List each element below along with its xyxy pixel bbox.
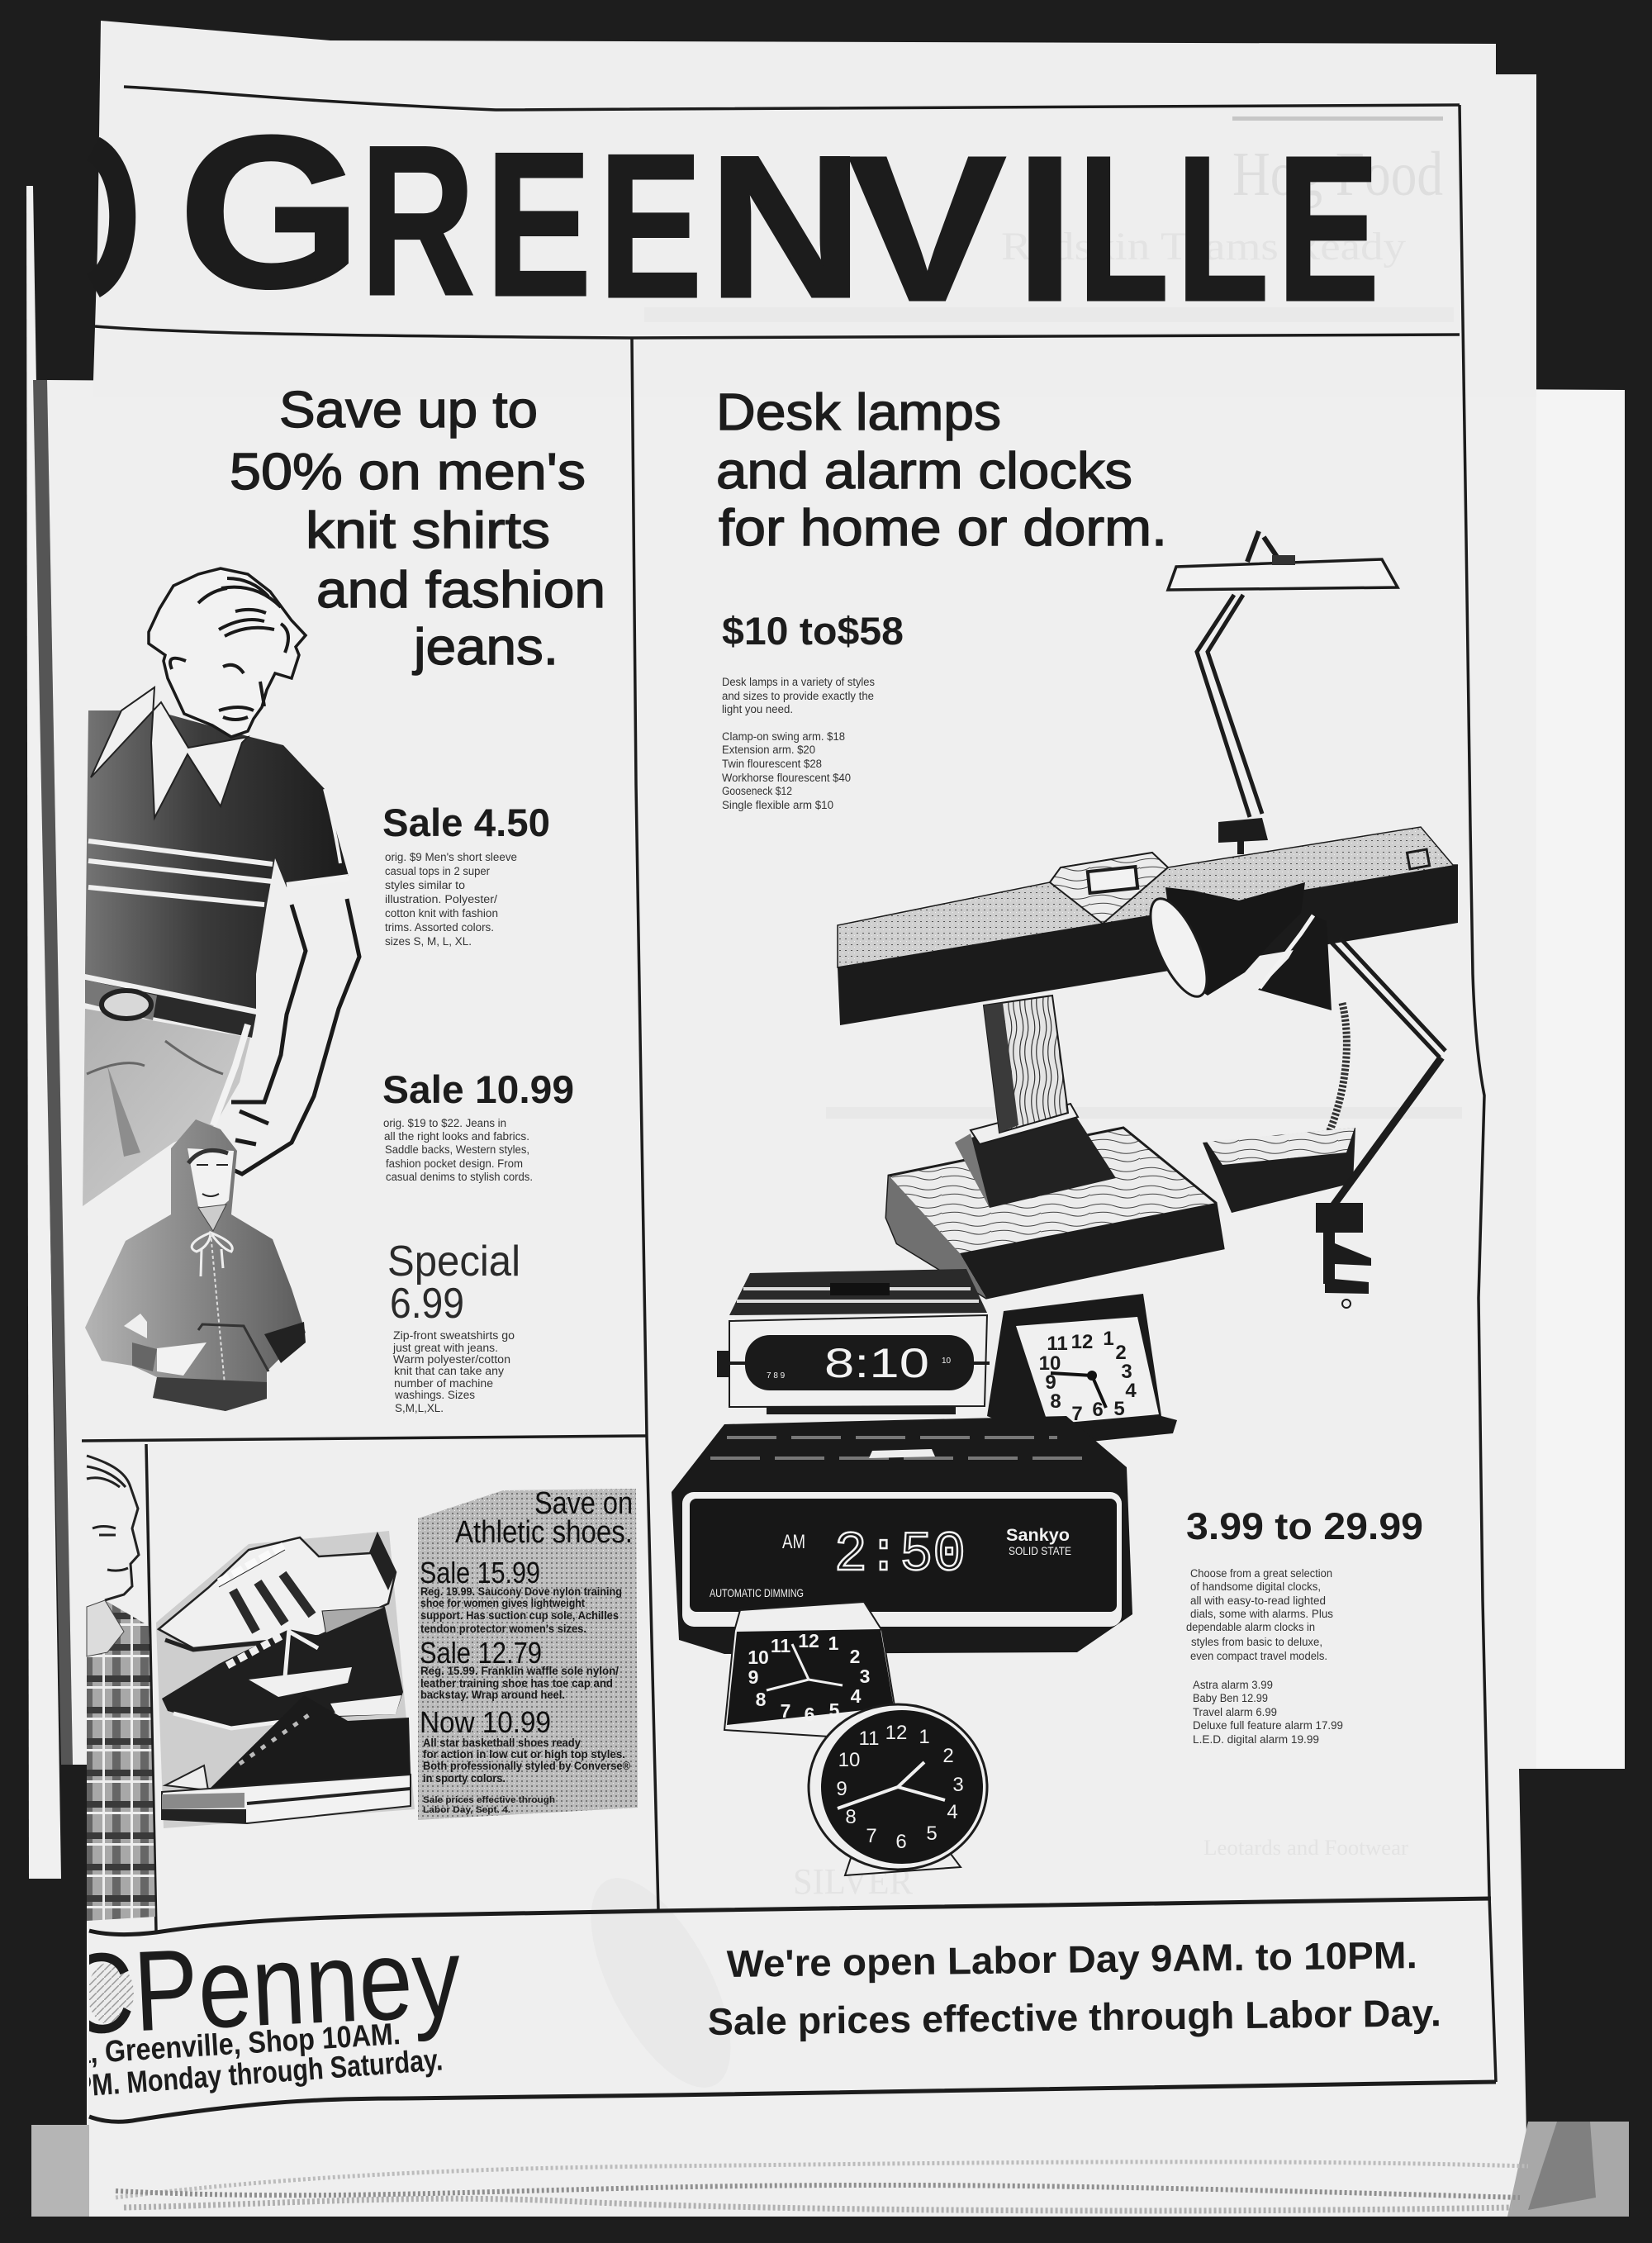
price: jeans: Sale 10.99 bbox=[382, 1067, 574, 1111]
illustration: Astra alarm clock bbox=[724, 1602, 895, 1737]
illustration: Astra alarm clock: 11 bbox=[771, 1635, 790, 1656]
logo: JCPenney bbox=[89, 1951, 459, 2041]
store hours: a, Greenville, Shop 10AM. bbox=[74, 2017, 401, 2070]
knit tops description: illustration. Polyester/ bbox=[385, 893, 497, 905]
clocks description: even compact travel models. bbox=[1190, 1650, 1327, 1662]
clocks description: Deluxe full feature alarm 17.99 bbox=[1193, 1719, 1343, 1732]
illustration: round Baby Ben alarm clock: 3 bbox=[952, 1774, 964, 1796]
store hours: PM. Monday through Saturday. bbox=[74, 2042, 444, 2103]
illustration: Astra alarm clock: 4 bbox=[851, 1685, 862, 1707]
jeans description: all the right looks and fabrics. bbox=[384, 1130, 529, 1143]
illustration: round Baby Ben alarm clock: 8 bbox=[845, 1806, 857, 1828]
bleed-through text from the reverse page: Redskin Teams Ready bbox=[1001, 225, 1406, 268]
illustration: round Baby Ben alarm clock: 10 bbox=[838, 1749, 860, 1771]
illustration: folding travel clock: 3 bbox=[1121, 1361, 1132, 1383]
illustration: folding travel clock: 7 bbox=[1071, 1403, 1083, 1425]
panel: athletic shoes copy: Reg. 19.99. Saucony Dove nylon training bbox=[420, 1585, 622, 1598]
illustration: 8:10 flip clock: 10 bbox=[942, 1357, 952, 1366]
paper folds at bottom bbox=[116, 2162, 1528, 2211]
heading: men's knit shirts: jeans. bbox=[412, 619, 558, 676]
illustration: round Baby Ben alarm clock: 2 bbox=[942, 1745, 954, 1767]
store hours bbox=[89, 2023, 442, 2095]
illustration: Sankyo digital clock: Sankyo bbox=[1006, 1526, 1070, 1545]
clocks description: dials, some with alarms. Plus bbox=[1190, 1608, 1333, 1620]
price: clocks: 3.99 to 29.99 bbox=[1186, 1505, 1423, 1547]
panel: athletic shoes copy: leather training shoe has toe cap and bbox=[420, 1676, 613, 1689]
heading: desk lamps and alarm clocks: Desk lamps bbox=[716, 384, 1001, 441]
illustration: large wood-grain desk lamp bbox=[838, 827, 1458, 1298]
panel: athletic shoes copy bbox=[418, 1486, 638, 1820]
footer message: Sale prices effective through Labor Day. bbox=[707, 1991, 1441, 2043]
panel: athletic shoes copy: Labor Day, Sept. 4. bbox=[423, 1805, 510, 1815]
illustration: gooseneck and swing-arm lamps bbox=[1203, 915, 1446, 1308]
sweatshirt description: S,M,L,XL. bbox=[395, 1402, 444, 1414]
title: GREENVILLE: L bbox=[1078, 113, 1169, 344]
price: sweatshirt special bbox=[387, 1238, 520, 1328]
sweatshirt description: washings. Sizes bbox=[394, 1389, 475, 1401]
illustration: round Baby Ben alarm clock bbox=[809, 1704, 987, 1875]
knit tops description: trims. Assorted colors. bbox=[385, 921, 494, 934]
panel: athletic shoes copy: shoe for women gives lightweight bbox=[420, 1596, 585, 1609]
clocks description: Travel alarm 6.99 bbox=[1193, 1706, 1277, 1718]
footer message: We're open Labor Day 9AM. to 10PM. bbox=[726, 1933, 1417, 1985]
jeans description: orig. $19 to $22. Jeans in bbox=[383, 1117, 506, 1129]
panel: athletic shoes copy: Save on bbox=[534, 1486, 633, 1521]
logo: JCPenney: CPenney bbox=[61, 1913, 463, 2059]
illustration: round Baby Ben alarm clock: 9 bbox=[836, 1778, 847, 1800]
bleed-through text from the reverse page bbox=[563, 116, 1462, 2108]
lamp description: Desk lamps in a variety of styles bbox=[722, 676, 875, 688]
lamp description: Gooseneck $12 bbox=[722, 785, 792, 797]
illustration: hooded sweatshirt bbox=[85, 1119, 306, 1411]
title: GREENVILLE: V bbox=[848, 113, 1006, 344]
heading: desk lamps and alarm clocks bbox=[716, 384, 1167, 557]
illustration: folding travel clock: 11 bbox=[1047, 1333, 1068, 1355]
clocks description: Astra alarm 3.99 bbox=[1193, 1679, 1273, 1691]
panel: athletic shoes copy: All star basketball shoes ready bbox=[423, 1736, 581, 1749]
lamp description: Workhorse flourescent $40 bbox=[722, 772, 851, 784]
panel: athletic shoes copy: Sale prices effective through bbox=[423, 1795, 555, 1805]
illustration: 8:10 flip clock: 7 8 9 bbox=[767, 1371, 786, 1380]
heading: men's knit shirts: 50% on men's bbox=[230, 444, 586, 501]
knit tops description: sizes S, M, L, XL. bbox=[385, 935, 472, 948]
illustration: man in knit shirt and jeans bbox=[83, 568, 359, 1206]
sweatshirt description: knit that can take any bbox=[394, 1365, 504, 1377]
illustration: 8:10 flip clock bbox=[717, 1269, 990, 1414]
title: GREENVILLE: I bbox=[1016, 113, 1074, 344]
heading: men's knit shirts bbox=[230, 382, 605, 676]
title: GREENVILLE: N bbox=[708, 113, 863, 340]
price: sweatshirt special: 6.99 bbox=[390, 1280, 464, 1328]
illustration: Astra alarm clock: 6 bbox=[805, 1704, 814, 1725]
illustration: round Baby Ben alarm clock: 1 bbox=[919, 1726, 930, 1748]
panel: athletic shoes copy: Sale 12.79 bbox=[420, 1636, 542, 1670]
illustration: folding travel clock: 6 bbox=[1092, 1399, 1104, 1421]
illustration: folding travel clock: 10 bbox=[1039, 1352, 1061, 1375]
jeans description: casual denims to stylish cords. bbox=[386, 1171, 533, 1183]
illustration: Astra alarm clock: 9 bbox=[748, 1666, 758, 1688]
illustration: round Baby Ben alarm clock: 11 bbox=[859, 1727, 879, 1750]
clocks description: Choose from a great selection bbox=[1190, 1567, 1332, 1580]
illustration: folding travel clock: 8 bbox=[1050, 1390, 1061, 1413]
clocks description: all with easy-to-read lighted bbox=[1190, 1594, 1326, 1607]
illustration: Astra alarm clock: 2 bbox=[850, 1646, 860, 1667]
lamp description: Extension arm. $20 bbox=[722, 744, 815, 756]
panel: athletic shoes copy: Both professionally styled by Converse® bbox=[423, 1759, 631, 1772]
illustration: Astra alarm clock: 7 bbox=[781, 1700, 790, 1722]
illustration: Astra alarm clock: 8 bbox=[756, 1689, 767, 1710]
jeans description: fashion pocket design. From bbox=[386, 1157, 523, 1170]
illustration: round Baby Ben alarm clock: 7 bbox=[866, 1825, 877, 1847]
sweatshirt description: Warm polyester/cotton bbox=[393, 1353, 510, 1366]
illustration: Sankyo digital clock bbox=[672, 1416, 1132, 1654]
clocks description: Baby Ben 12.99 bbox=[1193, 1692, 1268, 1704]
panel: athletic shoes copy: in sporty colors. bbox=[423, 1771, 506, 1784]
clocks description: L.E.D. digital alarm 19.99 bbox=[1193, 1733, 1319, 1746]
illustration: folding travel clock: 4 bbox=[1125, 1380, 1137, 1402]
partial letter at left of masthead bbox=[93, 149, 122, 286]
lamp description bbox=[722, 676, 875, 811]
title: GREENVILLE: E bbox=[1277, 113, 1379, 344]
knit tops description: casual tops in 2 super bbox=[385, 865, 490, 877]
illustration: Sankyo digital clock: SOLID STATE bbox=[1009, 1544, 1071, 1557]
title: GREENVILLE: E bbox=[486, 109, 591, 339]
heading: desk lamps and alarm clocks: for home or dorm. bbox=[719, 500, 1167, 557]
lamp description: and sizes to provide exactly the bbox=[722, 690, 874, 702]
title: GREENVILLE: R bbox=[360, 101, 475, 340]
jeans description bbox=[383, 1117, 533, 1183]
panel: athletic shoes copy: Now 10.99 bbox=[420, 1705, 551, 1739]
illustration: man in plaid shirt bbox=[87, 1456, 155, 1921]
illustration: round Baby Ben alarm clock: 4 bbox=[947, 1801, 958, 1823]
illustration: Astra alarm clock: 12 bbox=[798, 1630, 819, 1651]
illustration: folding travel clock: 2 bbox=[1115, 1342, 1127, 1364]
heading: men's knit shirts: knit shirts bbox=[306, 502, 550, 559]
clocks description bbox=[1186, 1567, 1343, 1746]
lamp description: Clamp-on swing arm. $18 bbox=[722, 730, 845, 743]
bleed-through text from the reverse page: Leotards and Footwear bbox=[1203, 1836, 1408, 1860]
panel: athletic shoes copy: tendon protector women's sizes. bbox=[420, 1622, 586, 1635]
clocks description: dependable alarm clocks in bbox=[1186, 1621, 1315, 1633]
frame lines of the ad bbox=[82, 87, 1496, 2122]
knit tops description: styles similar to bbox=[385, 879, 465, 891]
illustration: folding travel clock: 9 bbox=[1045, 1371, 1056, 1394]
sweatshirt description: number of machine bbox=[394, 1377, 493, 1390]
illustration: workhorse fluorescent lamp bbox=[1168, 531, 1398, 854]
title: GREENVILLE: L bbox=[1176, 113, 1269, 344]
jeans description: Saddle backs, Western styles, bbox=[385, 1143, 529, 1156]
title: GREENVILLE: G bbox=[178, 91, 362, 333]
heading: desk lamps and alarm clocks: and alarm clocks bbox=[716, 443, 1132, 500]
illustration: round Baby Ben alarm clock: 6 bbox=[895, 1831, 907, 1853]
price: lamps: $10 to$58 bbox=[722, 609, 904, 653]
illustration: Sankyo digital clock: 2:50 bbox=[834, 1523, 966, 1587]
panel: athletic shoes copy: for action in low cut or high top styles. bbox=[423, 1747, 625, 1761]
clocks description: of handsome digital clocks, bbox=[1190, 1580, 1321, 1593]
illustration: folding travel clock: 12 bbox=[1071, 1331, 1093, 1353]
illustration: Astra alarm clock: 10 bbox=[748, 1647, 769, 1668]
lamp description: light you need. bbox=[722, 703, 793, 715]
illustration: folding travel clock: 5 bbox=[1113, 1398, 1125, 1420]
price: sweatshirt special: Special bbox=[387, 1238, 520, 1285]
bleed-through text from the reverse page: Hog Food bbox=[1232, 140, 1443, 209]
lamp description: Twin flourescent $28 bbox=[722, 758, 822, 770]
illustration: folding travel clock bbox=[987, 1294, 1177, 1446]
sweatshirt description: just great with jeans. bbox=[392, 1342, 498, 1354]
bleed-through text from the reverse page: SILVER bbox=[793, 1861, 914, 1902]
price: knit tops: Sale 4.50 bbox=[382, 801, 550, 844]
knit tops description: orig. $9 Men's short sleeve bbox=[385, 851, 517, 863]
panel: athletic shoes copy: Athletic shoes. bbox=[455, 1515, 633, 1550]
illustration: folding travel clock: 1 bbox=[1103, 1328, 1114, 1350]
panel: athletic shoes copy: backstay. Wrap around heel. bbox=[420, 1688, 565, 1701]
illustration: Astra alarm clock: 3 bbox=[860, 1666, 870, 1687]
footer message bbox=[707, 1933, 1441, 2043]
illustration: round Baby Ben alarm clock: 5 bbox=[926, 1822, 938, 1845]
heading: men's knit shirts: and fashion bbox=[316, 562, 605, 619]
heading: men's knit shirts: Save up to bbox=[279, 382, 538, 439]
knit tops description bbox=[385, 851, 517, 948]
illustration: 8:10 flip clock: 8:10 bbox=[824, 1340, 929, 1386]
illustration: Astra alarm clock: 1 bbox=[828, 1632, 839, 1654]
sweatshirt description: Zip-front sweatshirts go bbox=[393, 1329, 515, 1342]
panel: athletic shoes copy: Reg. 15.99. Franklin waffle sole nylon/ bbox=[420, 1664, 619, 1677]
clocks description: styles from basic to deluxe, bbox=[1191, 1636, 1322, 1648]
illustration: Astra alarm clock: 5 bbox=[829, 1699, 840, 1721]
illustration: Sankyo digital clock: AUTOMATIC DIMMING bbox=[710, 1586, 804, 1599]
lamp description: Single flexible arm $10 bbox=[722, 799, 833, 811]
panel: athletic shoes copy: Sale 15.99 bbox=[420, 1556, 540, 1590]
title: GREENVILLE bbox=[178, 91, 1379, 344]
title: GREENVILLE: E bbox=[599, 111, 702, 340]
illustration: three athletic shoes bbox=[156, 1531, 415, 1828]
illustration: round Baby Ben alarm clock: 12 bbox=[885, 1722, 907, 1744]
illustration: spotlight lamp bbox=[1139, 882, 1305, 1004]
panel: athletic shoes copy: support. Has suction cup sole, Achilles bbox=[420, 1609, 619, 1622]
knit tops description: cotton knit with fashion bbox=[385, 907, 498, 920]
sweatshirt description bbox=[392, 1329, 515, 1414]
illustration: Sankyo digital clock: AM bbox=[782, 1531, 805, 1553]
